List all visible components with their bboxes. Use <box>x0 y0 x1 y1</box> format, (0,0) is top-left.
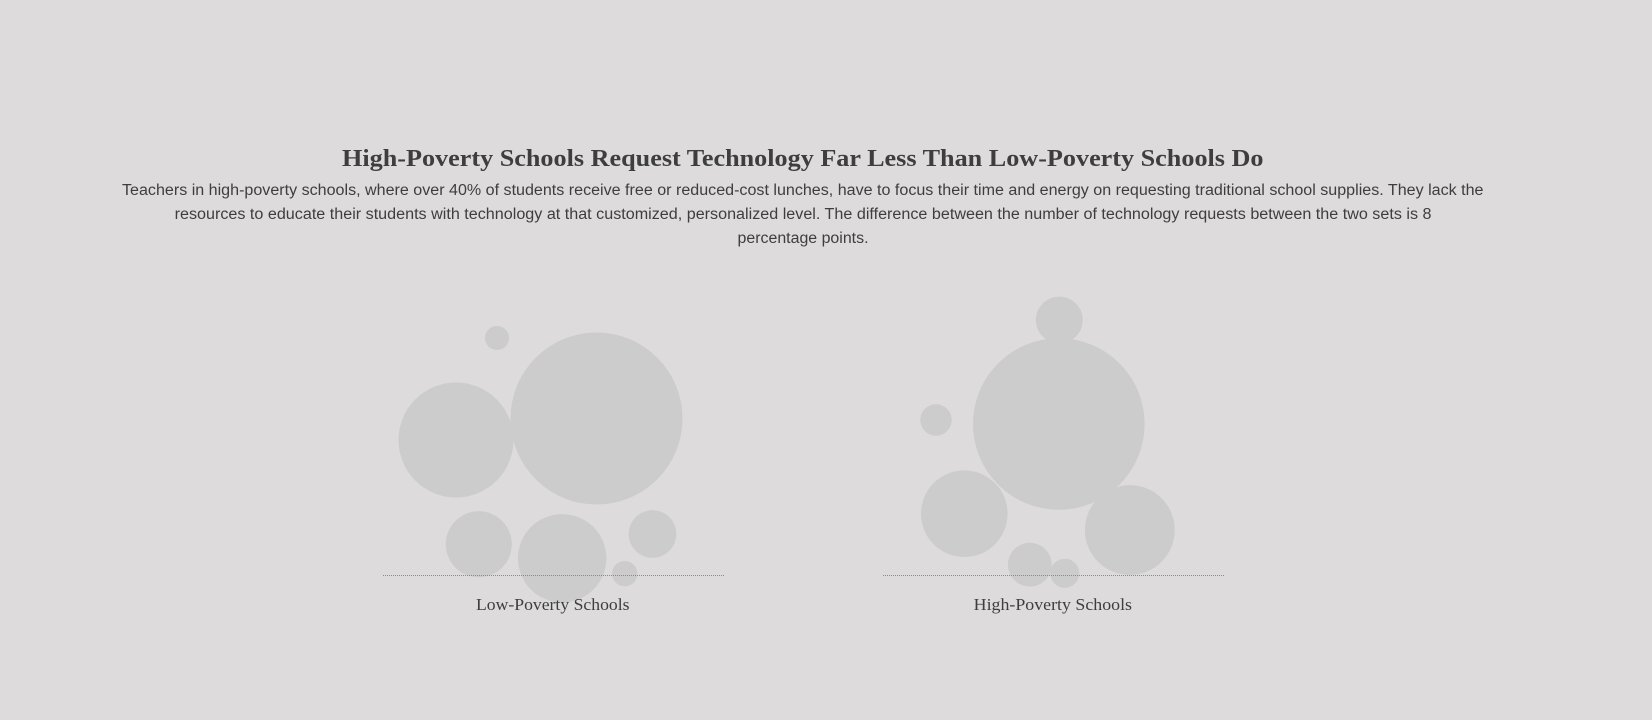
title: High-Poverty Schools Request Technology Far Less Than Low-Poverty Schools Do <box>342 146 1264 172</box>
chart: low-poverty schools bubbles <box>383 326 724 614</box>
bubble cluster: high-poverty <box>920 297 1175 588</box>
text block: description: percentage points. <box>738 230 868 247</box>
label: low-poverty schools: Low-Poverty Schools <box>476 595 630 614</box>
chart: high-poverty schools bubbles <box>883 297 1224 614</box>
text block: description: resources to educate their students with technology at that customized, personalized level. The difference between the number of technology requests between the two sets is 8 <box>175 206 1432 223</box>
label: high-poverty schools: High-Poverty Schools <box>974 595 1132 614</box>
text block: description <box>122 182 1483 247</box>
bubble cluster: low-poverty <box>398 326 682 602</box>
text block: description: Teachers in high-poverty schools, where over 40% of students receive free or reduced-cost lunches, have to focus their time and energy on requesting traditional school supplies. They lack the <box>122 182 1483 199</box>
